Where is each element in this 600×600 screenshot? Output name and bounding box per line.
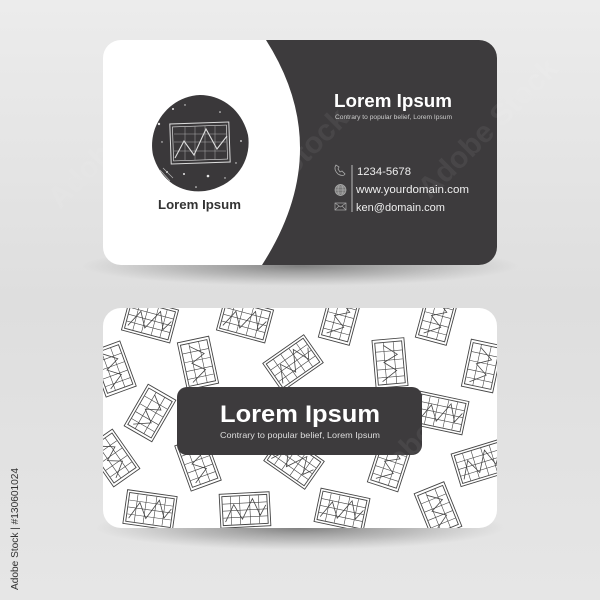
stock id: Adobe Stock | #130601024	[10, 468, 21, 590]
badge: speckles	[158, 104, 242, 188]
watermark: Adobe Stock	[352, 352, 505, 505]
tablet pattern	[103, 308, 497, 528]
card: white base	[103, 308, 497, 528]
phone number: 1234-5678	[357, 166, 411, 178]
logo badge	[152, 95, 249, 191]
card: white base	[103, 40, 497, 265]
badge: chart screen	[170, 122, 230, 164]
shadow: back card	[95, 506, 505, 550]
back card	[103, 308, 497, 528]
icon: phone	[335, 165, 345, 176]
badge: dark circle	[152, 95, 249, 191]
logo caption: Lorem Ipsum	[158, 198, 241, 212]
email: ken@domain.com	[356, 202, 445, 214]
business card mockup	[10, 40, 508, 590]
watermark: Adobe	[42, 126, 131, 215]
plate tagline: Contrary to popular belief, Lorem Ipsum	[220, 430, 380, 440]
label plate	[177, 387, 422, 455]
icon: mail	[335, 203, 346, 210]
card: dark curved panel	[262, 40, 497, 265]
website: www.yourdomain.com	[355, 184, 469, 196]
company heading: Lorem Ipsum	[334, 91, 452, 111]
watermark: Adobe Stock	[202, 102, 355, 255]
shadow: front card	[82, 246, 518, 286]
badge: scratch marks	[160, 168, 173, 181]
contact divider	[352, 165, 353, 212]
watermark: Adobe Stock	[412, 52, 565, 205]
front card	[103, 40, 497, 265]
tagline: Contrary to popular belief, Lorem Ipsum	[335, 114, 452, 121]
plate heading: Lorem Ipsum	[220, 401, 380, 428]
watermark	[42, 52, 565, 505]
icon: globe	[335, 184, 346, 196]
